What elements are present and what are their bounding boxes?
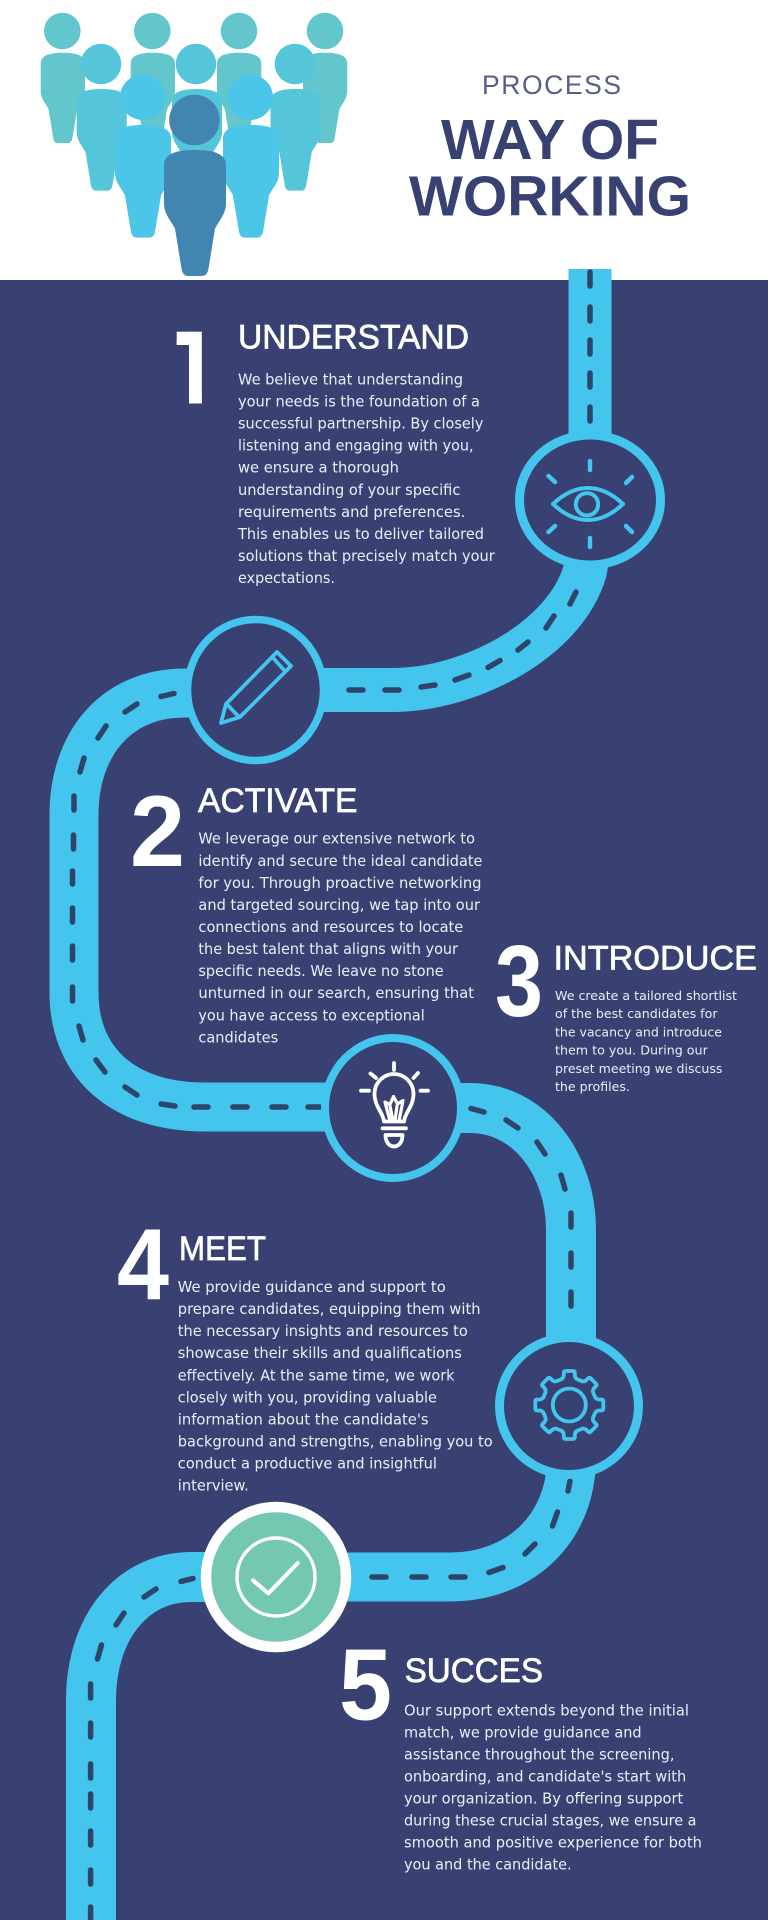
text block: meet: effectively. At the same time, we work (178, 1366, 455, 1384)
text block: succes: match, we provide guidance and (404, 1723, 642, 1741)
step 1: understand (150, 313, 495, 587)
step 2: activate (130, 776, 482, 1046)
heading: succes: SUCCES (405, 1652, 543, 1690)
icon: group of people (41, 13, 347, 276)
text block: activate (198, 830, 482, 1046)
text block: succes: onboarding, and candidate's start with (404, 1768, 686, 1786)
text block: succes: you and the candidate. (404, 1856, 572, 1874)
text block: introduce: them to you. During our (555, 1044, 709, 1059)
title (409, 70, 691, 228)
text block: introduce: the profiles. (555, 1080, 630, 1095)
text block: introduce: the vacancy and introduce (555, 1025, 722, 1040)
text block: activate: you have access to exceptional (198, 1006, 425, 1024)
text block: activate: unturned in our search, ensuring that (198, 984, 474, 1002)
text block: understand: We believe that understanding (238, 370, 463, 388)
winding road (74, 269, 590, 1920)
heading: introduce: INTRODUCE (554, 940, 757, 978)
text block: understand: we ensure a thorough (238, 459, 399, 477)
text block: understand: This enables us to deliver tailored (237, 525, 484, 543)
text block: succes (404, 1701, 702, 1874)
text block: understand: expectations. (238, 569, 335, 587)
text block: introduce: We create a tailored shortlist (555, 989, 737, 1004)
text block: meet: prepare candidates, equipping them with (178, 1300, 481, 1318)
text block: activate: the best talent that aligns with your (198, 940, 459, 958)
text block: succes: your organization. By offering support (404, 1790, 683, 1808)
text block: understand: solutions that precisely match your (238, 547, 495, 565)
text block: activate: We leverage our extensive network to (198, 830, 475, 848)
step number 1: 1 (164, 313, 220, 425)
text block: succes: during these crucial stages, we ensure a (404, 1812, 696, 1830)
heading: meet: MEET (179, 1230, 266, 1268)
step 4: meet (117, 1209, 493, 1495)
text block: activate: and targeted sourcing, we tap into our (198, 896, 481, 914)
text block: meet: background and strengths, enabling you to (178, 1432, 493, 1450)
text block: meet (178, 1278, 493, 1495)
text block: succes: assistance throughout the screening, (404, 1745, 674, 1763)
step number 5: 5 (339, 1630, 392, 1742)
text block: understand (237, 370, 495, 587)
step 3: introduce (495, 926, 757, 1095)
text block: activate: candidates (198, 1028, 278, 1046)
text block: activate: for you. Through proactive networking (198, 874, 482, 892)
title: WAY OF (441, 108, 659, 172)
text block: succes: smooth and positive experience for both (404, 1834, 702, 1852)
text block: meet: information about the candidate's (178, 1410, 429, 1428)
text block: introduce: of the best candidates for (555, 1007, 718, 1022)
road centre dashes (72, 272, 590, 1920)
text block: understand: your needs is the foundation of a (238, 393, 480, 411)
text block: understand: successful partnership. By closely (238, 415, 483, 433)
text block: succes: Our support extends beyond the initial (404, 1701, 689, 1719)
text block: understand: listening and engaging with you, (238, 437, 474, 455)
text block: meet: We provide guidance and support to (178, 1278, 446, 1296)
step number 2: 2 (130, 776, 185, 888)
text block: understand: understanding of your specific (238, 481, 460, 499)
text block: activate: identify and secure the ideal candidate (198, 852, 482, 870)
text block: introduce (555, 989, 737, 1095)
text block: meet: conduct a productive and insightful (178, 1455, 437, 1473)
text block: meet: the necessary insights and resources to (178, 1322, 468, 1340)
text block: activate: connections and resources to locate (198, 918, 463, 936)
step number 4: 4 (117, 1209, 169, 1321)
icon: check mark badge (206, 1507, 346, 1647)
icon: gear in circle (500, 1338, 638, 1474)
icon: light bulb in circle (325, 1038, 461, 1178)
step number 1 (150, 313, 232, 425)
step number 3: 3 (495, 926, 543, 1038)
step 5: succes (339, 1630, 702, 1874)
title: WORKING (409, 164, 691, 228)
text block: meet: interview. (178, 1477, 249, 1495)
text block: understand: requirements and preferences. (238, 503, 465, 521)
text block: activate: specific needs. We leave no stone (198, 962, 444, 980)
icon: eye in circle (520, 435, 660, 565)
heading: understand: UNDERSTAND (238, 318, 469, 356)
text block: introduce: preset meeting we discuss (555, 1062, 723, 1077)
icon: pencil in circle (188, 620, 324, 760)
text block: meet: closely with you, providing valuable (178, 1388, 437, 1406)
heading: activate: ACTIVATE (198, 782, 358, 820)
text block: meet: showcase their skills and qualifications (178, 1344, 462, 1362)
title: PROCESS (482, 70, 621, 100)
